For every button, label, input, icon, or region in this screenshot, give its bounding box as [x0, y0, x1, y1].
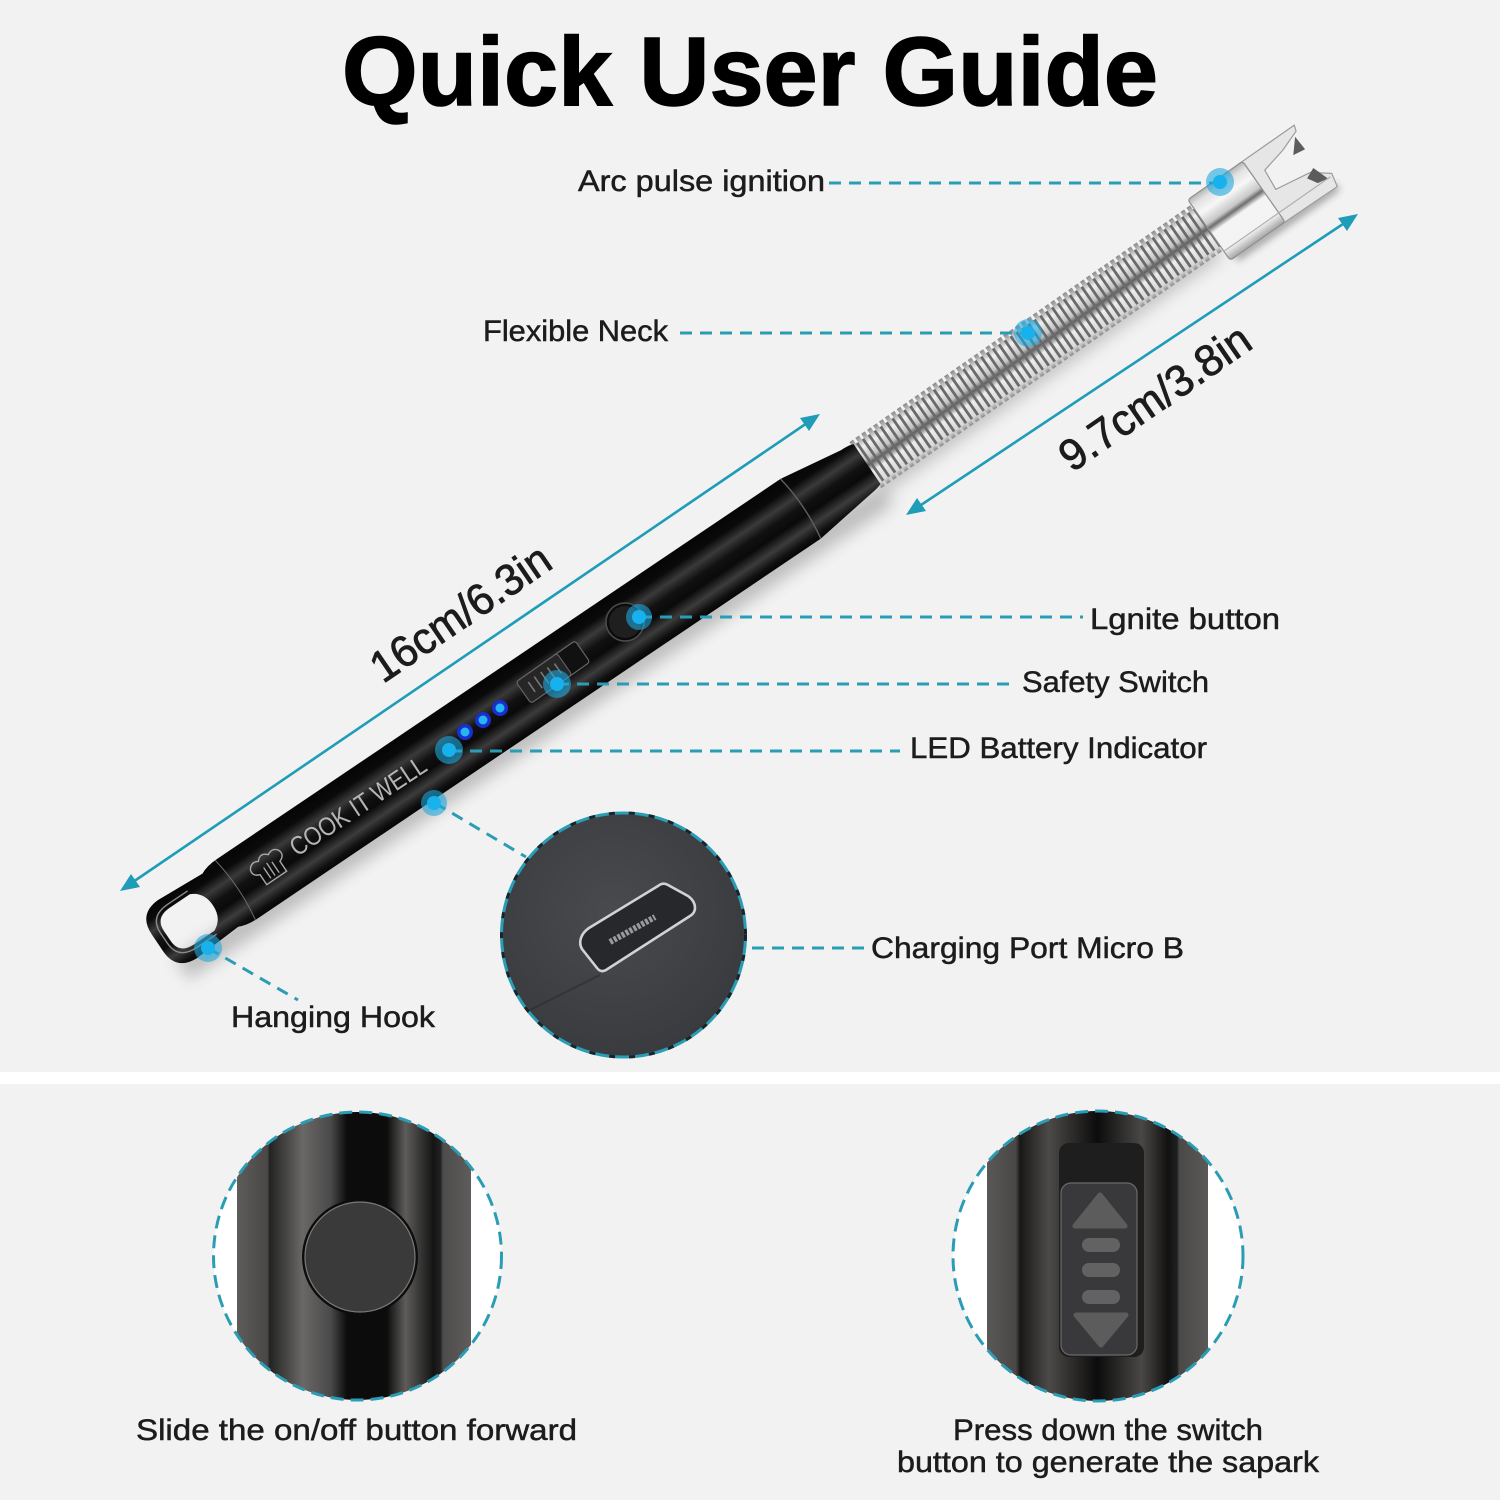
- dimension label: 9.7cm/3.8in: 9.7cm/3.8in: [1050, 315, 1260, 481]
- callout: flexible neck: Flexible Neck: [483, 315, 669, 348]
- caption: press switch: [897, 1414, 1320, 1479]
- head shadow: [1233, 183, 1340, 261]
- caption: press switch: button to generate the sapark: [897, 1446, 1320, 1479]
- callout: safety switch: Safety Switch: [1022, 666, 1209, 699]
- callout: LED battery indicator: LED Battery Indicator: [910, 732, 1207, 765]
- lighter shadow: [166, 240, 1234, 979]
- safety switch on handle: [516, 641, 590, 703]
- hook rim highlight: [149, 891, 217, 960]
- chef hat logo: [247, 845, 291, 888]
- callout: charging port leader: [421, 790, 526, 857]
- caption: slide button: Slide the on/off button forward: [136, 1414, 577, 1447]
- callout: LED battery indicator: [435, 732, 1207, 765]
- micro USB port: [580, 884, 695, 971]
- lower rail: [1224, 177, 1330, 251]
- dimension arrow: 9.7cm: [906, 214, 1358, 515]
- cone seam: [781, 477, 823, 539]
- callout: arc pulse ignition: Arc pulse ignition: [578, 165, 825, 198]
- switch slider with arrows: [1061, 1183, 1137, 1355]
- callout: hanging hook: Hanging Hook: [231, 1001, 436, 1034]
- lower electrode tip: [1304, 165, 1328, 188]
- callout: safety switch: [543, 666, 1209, 699]
- caption: press switch: Press down the switch: [953, 1414, 1263, 1447]
- panel: safety switch close-up: [953, 1100, 1243, 1420]
- panel: ignite button close-up: [214, 1100, 502, 1420]
- callout: flexible neck: [483, 315, 1042, 348]
- LED battery lights: [457, 700, 508, 740]
- callout: charging port magnifier: [502, 813, 746, 1057]
- dimension label: 16cm/6.3in: 16cm/6.3in: [361, 535, 560, 692]
- callout: charging port micro B: Charging Port Micro B: [871, 932, 1184, 965]
- metal collar: [1188, 161, 1285, 260]
- callout: hanging hook: [194, 934, 436, 1034]
- title: Quick User Guide: [342, 17, 1158, 126]
- callout: arc pulse ignition: [578, 165, 1234, 198]
- lighter handle: [137, 434, 887, 973]
- switch slot: [1059, 1143, 1144, 1357]
- round button: [302, 1199, 418, 1315]
- port contacts: [610, 917, 655, 942]
- metal ignition head: [1188, 123, 1342, 264]
- flexible neck spring: [865, 225, 1210, 465]
- upper electrode tip: [1285, 136, 1305, 157]
- dimension arrow: 16cm: [120, 414, 820, 891]
- electrode prongs plate: [1237, 123, 1340, 227]
- handle seam: [215, 859, 258, 920]
- ignite button on handle: [606, 603, 644, 641]
- callout: ignite button: [626, 603, 1280, 636]
- brand name on handle: COOK IT WELL: [284, 750, 432, 862]
- callout: ignite button: Lgnite button: [1090, 603, 1280, 636]
- lighter: body, neck and head: [137, 123, 1342, 979]
